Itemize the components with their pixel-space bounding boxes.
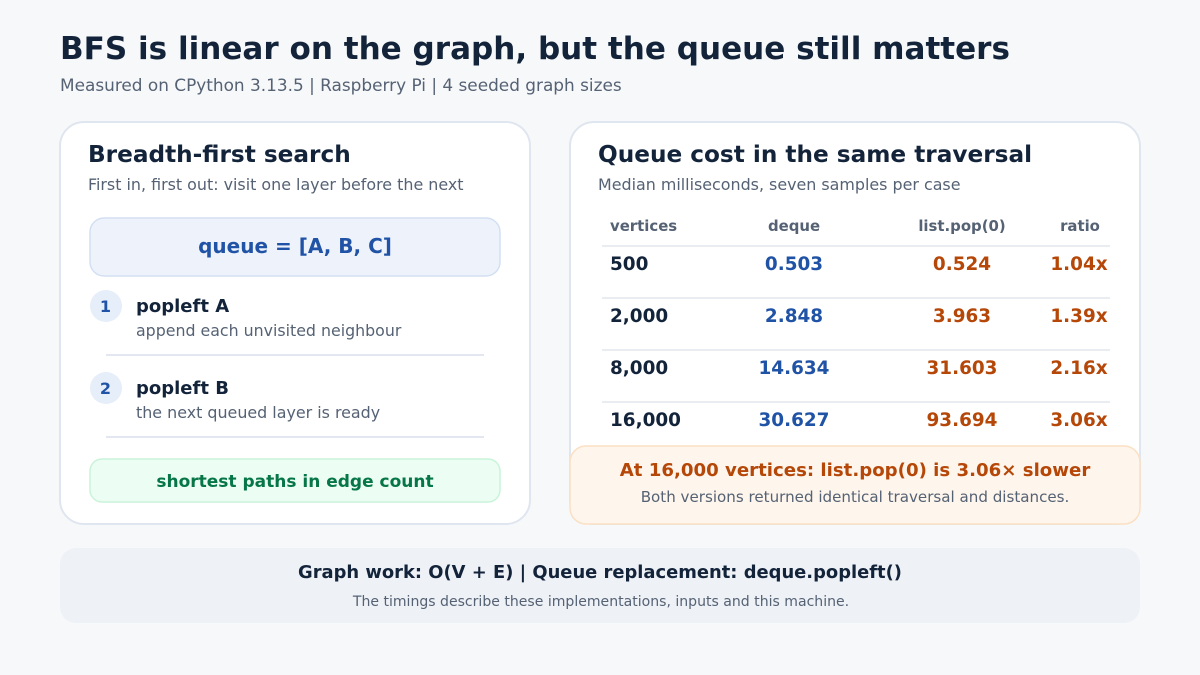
step 1 bbox=[90, 290, 402, 340]
row 8000 bbox=[610, 358, 1108, 379]
panel heading: Breadth-first search bbox=[88, 141, 351, 168]
row 2000 bbox=[610, 306, 1108, 327]
panel heading: Queue cost in the same traversal bbox=[598, 141, 1032, 168]
row 500: 0.503 bbox=[765, 254, 823, 275]
footer band: Graph work: O(V + E) | Queue replacement: deque.popleft() bbox=[298, 562, 902, 583]
row 2000: 1.39x bbox=[1050, 306, 1108, 327]
row 8000: 14.634 bbox=[759, 358, 829, 379]
queue box: queue = [A, B, C] bbox=[198, 234, 392, 258]
step 2: the next queued layer is ready bbox=[136, 403, 380, 422]
subtitle: Measured on CPython 3.13.5 | Raspberry Pi | 4 seeded graph sizes bbox=[60, 75, 622, 95]
row 16000: 3.06x bbox=[1050, 410, 1108, 431]
row 8000: 8,000 bbox=[610, 358, 668, 379]
panel: breadth-first search bbox=[60, 122, 530, 524]
table header: vertices bbox=[610, 217, 677, 235]
row 16000 bbox=[610, 410, 1108, 431]
row 2000: 3.963 bbox=[933, 306, 991, 327]
row 16000: 93.694 bbox=[927, 410, 997, 431]
callout: Both versions returned identical traversal and distances. bbox=[641, 488, 1069, 506]
row 500: 0.524 bbox=[933, 254, 991, 275]
table header bbox=[610, 217, 1100, 235]
result box bbox=[90, 459, 500, 502]
row 16000: 16,000 bbox=[610, 410, 681, 431]
callout bbox=[570, 446, 1140, 524]
row 500 bbox=[610, 254, 1108, 275]
step 2: 2 bbox=[100, 379, 111, 398]
table header: deque bbox=[768, 217, 820, 235]
row 500: 1.04x bbox=[1050, 254, 1108, 275]
result box: shortest paths in edge count bbox=[156, 472, 434, 492]
step 1: append each unvisited neighbour bbox=[136, 321, 402, 340]
panel subheading: Median milliseconds, seven samples per case bbox=[598, 175, 960, 194]
panel subheading: First in, first out: visit one layer before the next bbox=[88, 175, 463, 194]
step 1: 1 bbox=[100, 297, 111, 316]
row 8000: 31.603 bbox=[927, 358, 997, 379]
callout: At 16,000 vertices: list.pop(0) is 3.06× slower bbox=[620, 460, 1090, 481]
queue box bbox=[90, 218, 500, 276]
row 8000: 2.16x bbox=[1050, 358, 1108, 379]
step 2: popleft B bbox=[136, 378, 229, 399]
row 500: 500 bbox=[610, 254, 648, 275]
panel: queue cost bbox=[570, 122, 1140, 524]
footer band: The timings describe these implementations, inputs and this machine. bbox=[352, 594, 849, 610]
table header: list.pop(0) bbox=[918, 217, 1006, 235]
table bbox=[602, 217, 1110, 431]
footer band bbox=[60, 548, 1140, 623]
row 2000: 2,000 bbox=[610, 306, 668, 327]
row 16000: 30.627 bbox=[759, 410, 829, 431]
step 1: popleft A bbox=[136, 296, 229, 317]
row 2000: 2.848 bbox=[765, 306, 823, 327]
title: BFS is linear on the graph, but the queue still matters bbox=[60, 31, 1010, 67]
step 2 bbox=[90, 372, 380, 422]
table header: ratio bbox=[1060, 217, 1100, 235]
